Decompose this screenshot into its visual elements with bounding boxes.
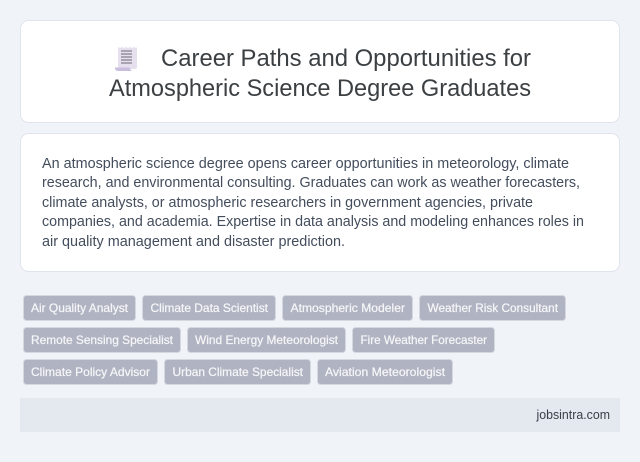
tag <box>188 328 346 352</box>
icon: document <box>115 47 137 71</box>
tag <box>24 296 136 320</box>
heading: Career Paths and Opportunities for <box>161 45 531 72</box>
tag: Atmospheric Modeler <box>290 301 405 315</box>
panel: title header <box>20 20 620 122</box>
footer text: jobsintra.com <box>536 408 610 422</box>
tag: Remote Sensing Specialist <box>31 333 174 347</box>
tag <box>24 360 158 384</box>
heading <box>109 45 531 102</box>
tag: Air Quality Analyst <box>31 301 129 315</box>
tag: Fire Weather Forecaster <box>360 333 487 347</box>
text block: description: climate analysts, or atmospheric researchers in government agencies, private <box>42 195 533 211</box>
tag: Weather Risk Consultant <box>428 301 559 315</box>
tag <box>282 296 412 320</box>
tag <box>352 328 494 352</box>
tags: career paths <box>24 296 566 384</box>
text block: description: An atmospheric science degree opens career opportunities in meteorology, climate <box>42 156 569 172</box>
tag: Climate Policy Advisor <box>31 365 150 379</box>
text block: description: air quality management and disaster prediction. <box>42 234 345 250</box>
tag: Urban Climate Specialist <box>172 365 304 379</box>
heading: Atmospheric Science Degree Graduates <box>109 75 531 102</box>
tag <box>420 296 566 320</box>
tag: Climate Data Scientist <box>150 301 269 315</box>
tag: Wind Energy Meteorologist <box>195 333 339 347</box>
text block: description <box>42 156 584 250</box>
tag <box>164 360 310 384</box>
tag <box>318 360 452 384</box>
tag <box>142 296 276 320</box>
text block: description: research, and environmental consulting. Graduates can work as weather forecasters, <box>42 175 580 191</box>
footer bar <box>20 398 620 432</box>
text block: description: companies, and academia. Expertise in data analysis and modeling enhances roles in <box>42 214 584 230</box>
panel: description <box>20 134 620 272</box>
tag: Aviation Meteorologist <box>325 365 446 379</box>
tag <box>24 328 180 352</box>
